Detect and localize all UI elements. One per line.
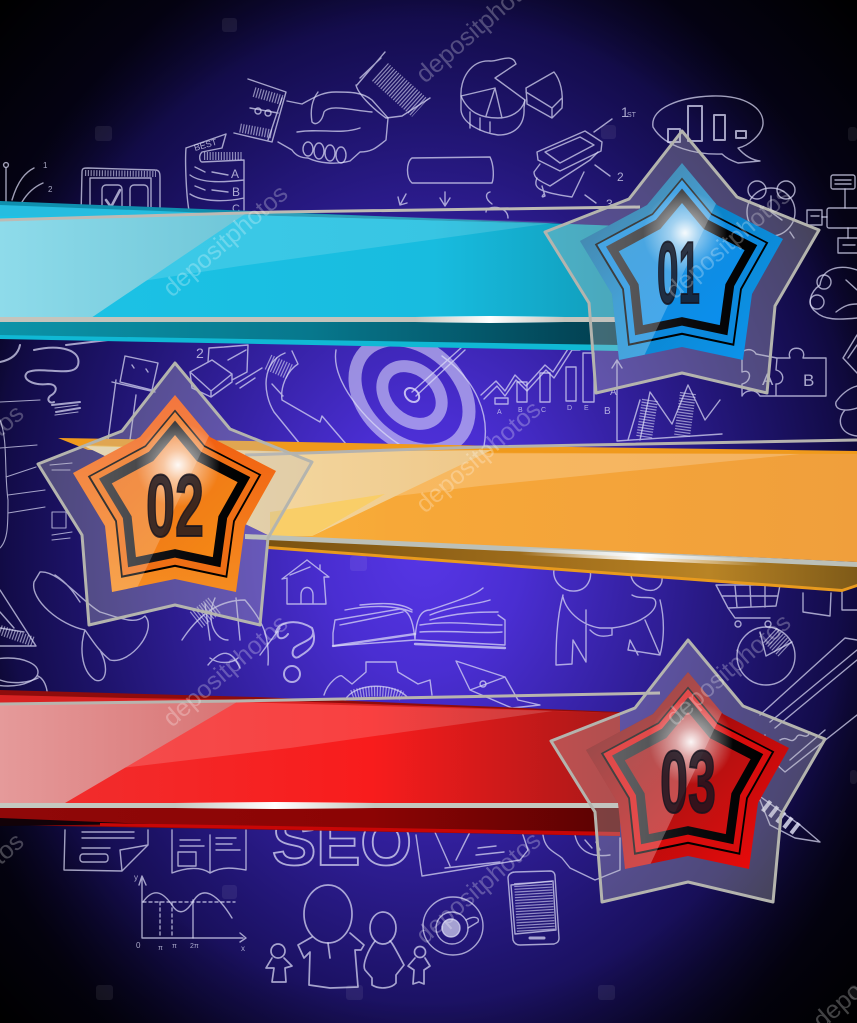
doodle: pyramid and disc xyxy=(0,590,47,702)
doodle: line graph: 2π xyxy=(190,943,199,950)
doodle: piggy bank xyxy=(810,267,857,319)
orange glass sheen xyxy=(280,453,800,520)
doodle: paper clip document xyxy=(64,830,148,871)
doodle: bar and line chart: A xyxy=(497,409,502,416)
doodle: top-left arrows xyxy=(4,161,53,202)
red body xyxy=(0,702,620,803)
doodle: laptop xyxy=(456,661,540,708)
doodle: handshake figures xyxy=(554,570,663,665)
orange frame lines xyxy=(245,440,857,455)
doodle: smartphone xyxy=(508,871,559,945)
blue frame lines xyxy=(0,207,640,220)
doodle: pen and keyboard xyxy=(758,638,857,842)
doodle: top-left arrows: 1 xyxy=(43,161,48,170)
doodle: line graph xyxy=(134,873,246,953)
doodle: line graph: x xyxy=(241,944,245,953)
doodle: question mark xyxy=(276,622,314,682)
text: ranking labels: 3 xyxy=(606,197,613,211)
doodle: puzzle pieces xyxy=(741,348,826,396)
doodle: coffee cup xyxy=(423,897,483,955)
doodle: target with arrow xyxy=(333,317,491,473)
doodle: puzzle pieces: B xyxy=(803,371,814,390)
doodle: best list: BEST xyxy=(193,137,219,153)
doodle: handshake xyxy=(234,52,430,163)
doodle: line graph: y xyxy=(134,873,138,882)
doodle: SEO: SEO xyxy=(272,805,412,879)
doodle: tablet checkbox xyxy=(81,168,160,215)
badge: star 01 xyxy=(545,131,819,393)
star body xyxy=(580,163,783,360)
doodle: line graph: π xyxy=(158,945,163,952)
glass star xyxy=(38,363,312,625)
doodle: lower left lines xyxy=(0,400,78,548)
depositphotos watermarks: depositphotos xyxy=(158,179,293,303)
doodle: idea document xyxy=(416,830,528,876)
red frame lines xyxy=(0,693,660,704)
doodle: bar and line chart: B xyxy=(518,407,523,414)
red glass sheen xyxy=(0,702,553,782)
doodle: line graph: π xyxy=(172,943,177,950)
doodle: gear xyxy=(324,662,432,700)
doodle: stack of books xyxy=(534,119,612,203)
glass star xyxy=(551,640,825,902)
doodle: bar and line chart xyxy=(481,349,594,416)
blue top wedge xyxy=(0,201,620,232)
depositphotos watermarks: depositphotos xyxy=(661,608,796,732)
doodle: open book xyxy=(333,588,505,648)
red top wedge xyxy=(0,690,620,722)
doodle: best list: B xyxy=(232,185,240,199)
depositphotos watermarks: depositphotos xyxy=(411,395,546,519)
badge: star 02 xyxy=(38,363,312,625)
doodle: pie chart xyxy=(461,58,562,135)
doodle: bar and line chart: C xyxy=(541,407,546,414)
text: ranking labels: ST xyxy=(627,112,637,119)
doodle: squiggle and folder xyxy=(0,340,108,412)
doodle: magazine xyxy=(172,830,246,873)
doodle: bar and line chart: D xyxy=(567,405,572,412)
depositphotos watermarks: depositphotos xyxy=(661,181,796,305)
depositphotos watermarks: depositphotos xyxy=(411,826,546,950)
glass star xyxy=(545,131,819,393)
doodle: shopping cart xyxy=(716,585,780,627)
doodle: top-left arrows: 2 xyxy=(48,185,53,194)
panel: orange banner 02 xyxy=(58,438,857,592)
doodle: rounded button with arrows xyxy=(398,157,508,218)
panel: blue banner 01 xyxy=(0,201,640,351)
number: 03 xyxy=(660,732,716,831)
doodle: flow chart xyxy=(807,175,857,253)
doodle: best list: C xyxy=(232,203,240,215)
badge: star 01: 01 xyxy=(657,223,700,322)
doodle: right edge icons xyxy=(836,335,857,436)
orange top strip xyxy=(58,438,857,456)
doodle: mountain chart xyxy=(604,360,722,441)
doodle: speech bubble with bars xyxy=(653,96,763,163)
doodle: best list: A xyxy=(231,167,239,181)
badge: star 03 xyxy=(551,640,825,902)
doodle: puzzle pieces: A xyxy=(762,370,774,389)
doodle: bottom gear xyxy=(543,835,620,880)
doodle: best list xyxy=(186,134,244,215)
doodle: computer mouse xyxy=(34,572,148,681)
blue glass sheen xyxy=(0,213,560,303)
doodle: family xyxy=(266,885,430,988)
orange body xyxy=(84,445,857,562)
blue body xyxy=(0,216,620,318)
depositphotos watermarks: depositphotos xyxy=(158,609,293,733)
doodle: alarm clock xyxy=(747,181,795,238)
doodle: house xyxy=(282,560,329,604)
doodle: clock pie xyxy=(737,627,795,685)
blue lower shadow xyxy=(0,322,620,346)
doodle: usb stick xyxy=(108,356,158,440)
doodle: line graph: 0 xyxy=(136,941,141,950)
text: ranking labels: 1 xyxy=(621,104,629,120)
doodle: bar and line chart: E xyxy=(584,405,589,412)
orange lower shadow xyxy=(265,539,857,591)
panel: red banner 03 xyxy=(0,690,660,836)
doodle: cubes: 2 xyxy=(196,345,204,361)
doodle: mountain chart: A xyxy=(610,387,617,398)
red lower shadow xyxy=(0,808,620,836)
doodle: right side puzzle xyxy=(803,592,857,616)
doodle: mountain chart: B xyxy=(604,406,611,417)
star body xyxy=(73,395,276,592)
doodle: curved arrow xyxy=(266,351,346,444)
number: 02 xyxy=(146,456,204,555)
doodle: cubes xyxy=(190,345,262,397)
doodle: person silhouette xyxy=(182,598,280,668)
star body xyxy=(586,672,789,869)
text: ranking labels: 2 xyxy=(617,170,624,184)
text: ranking labels xyxy=(606,104,637,211)
